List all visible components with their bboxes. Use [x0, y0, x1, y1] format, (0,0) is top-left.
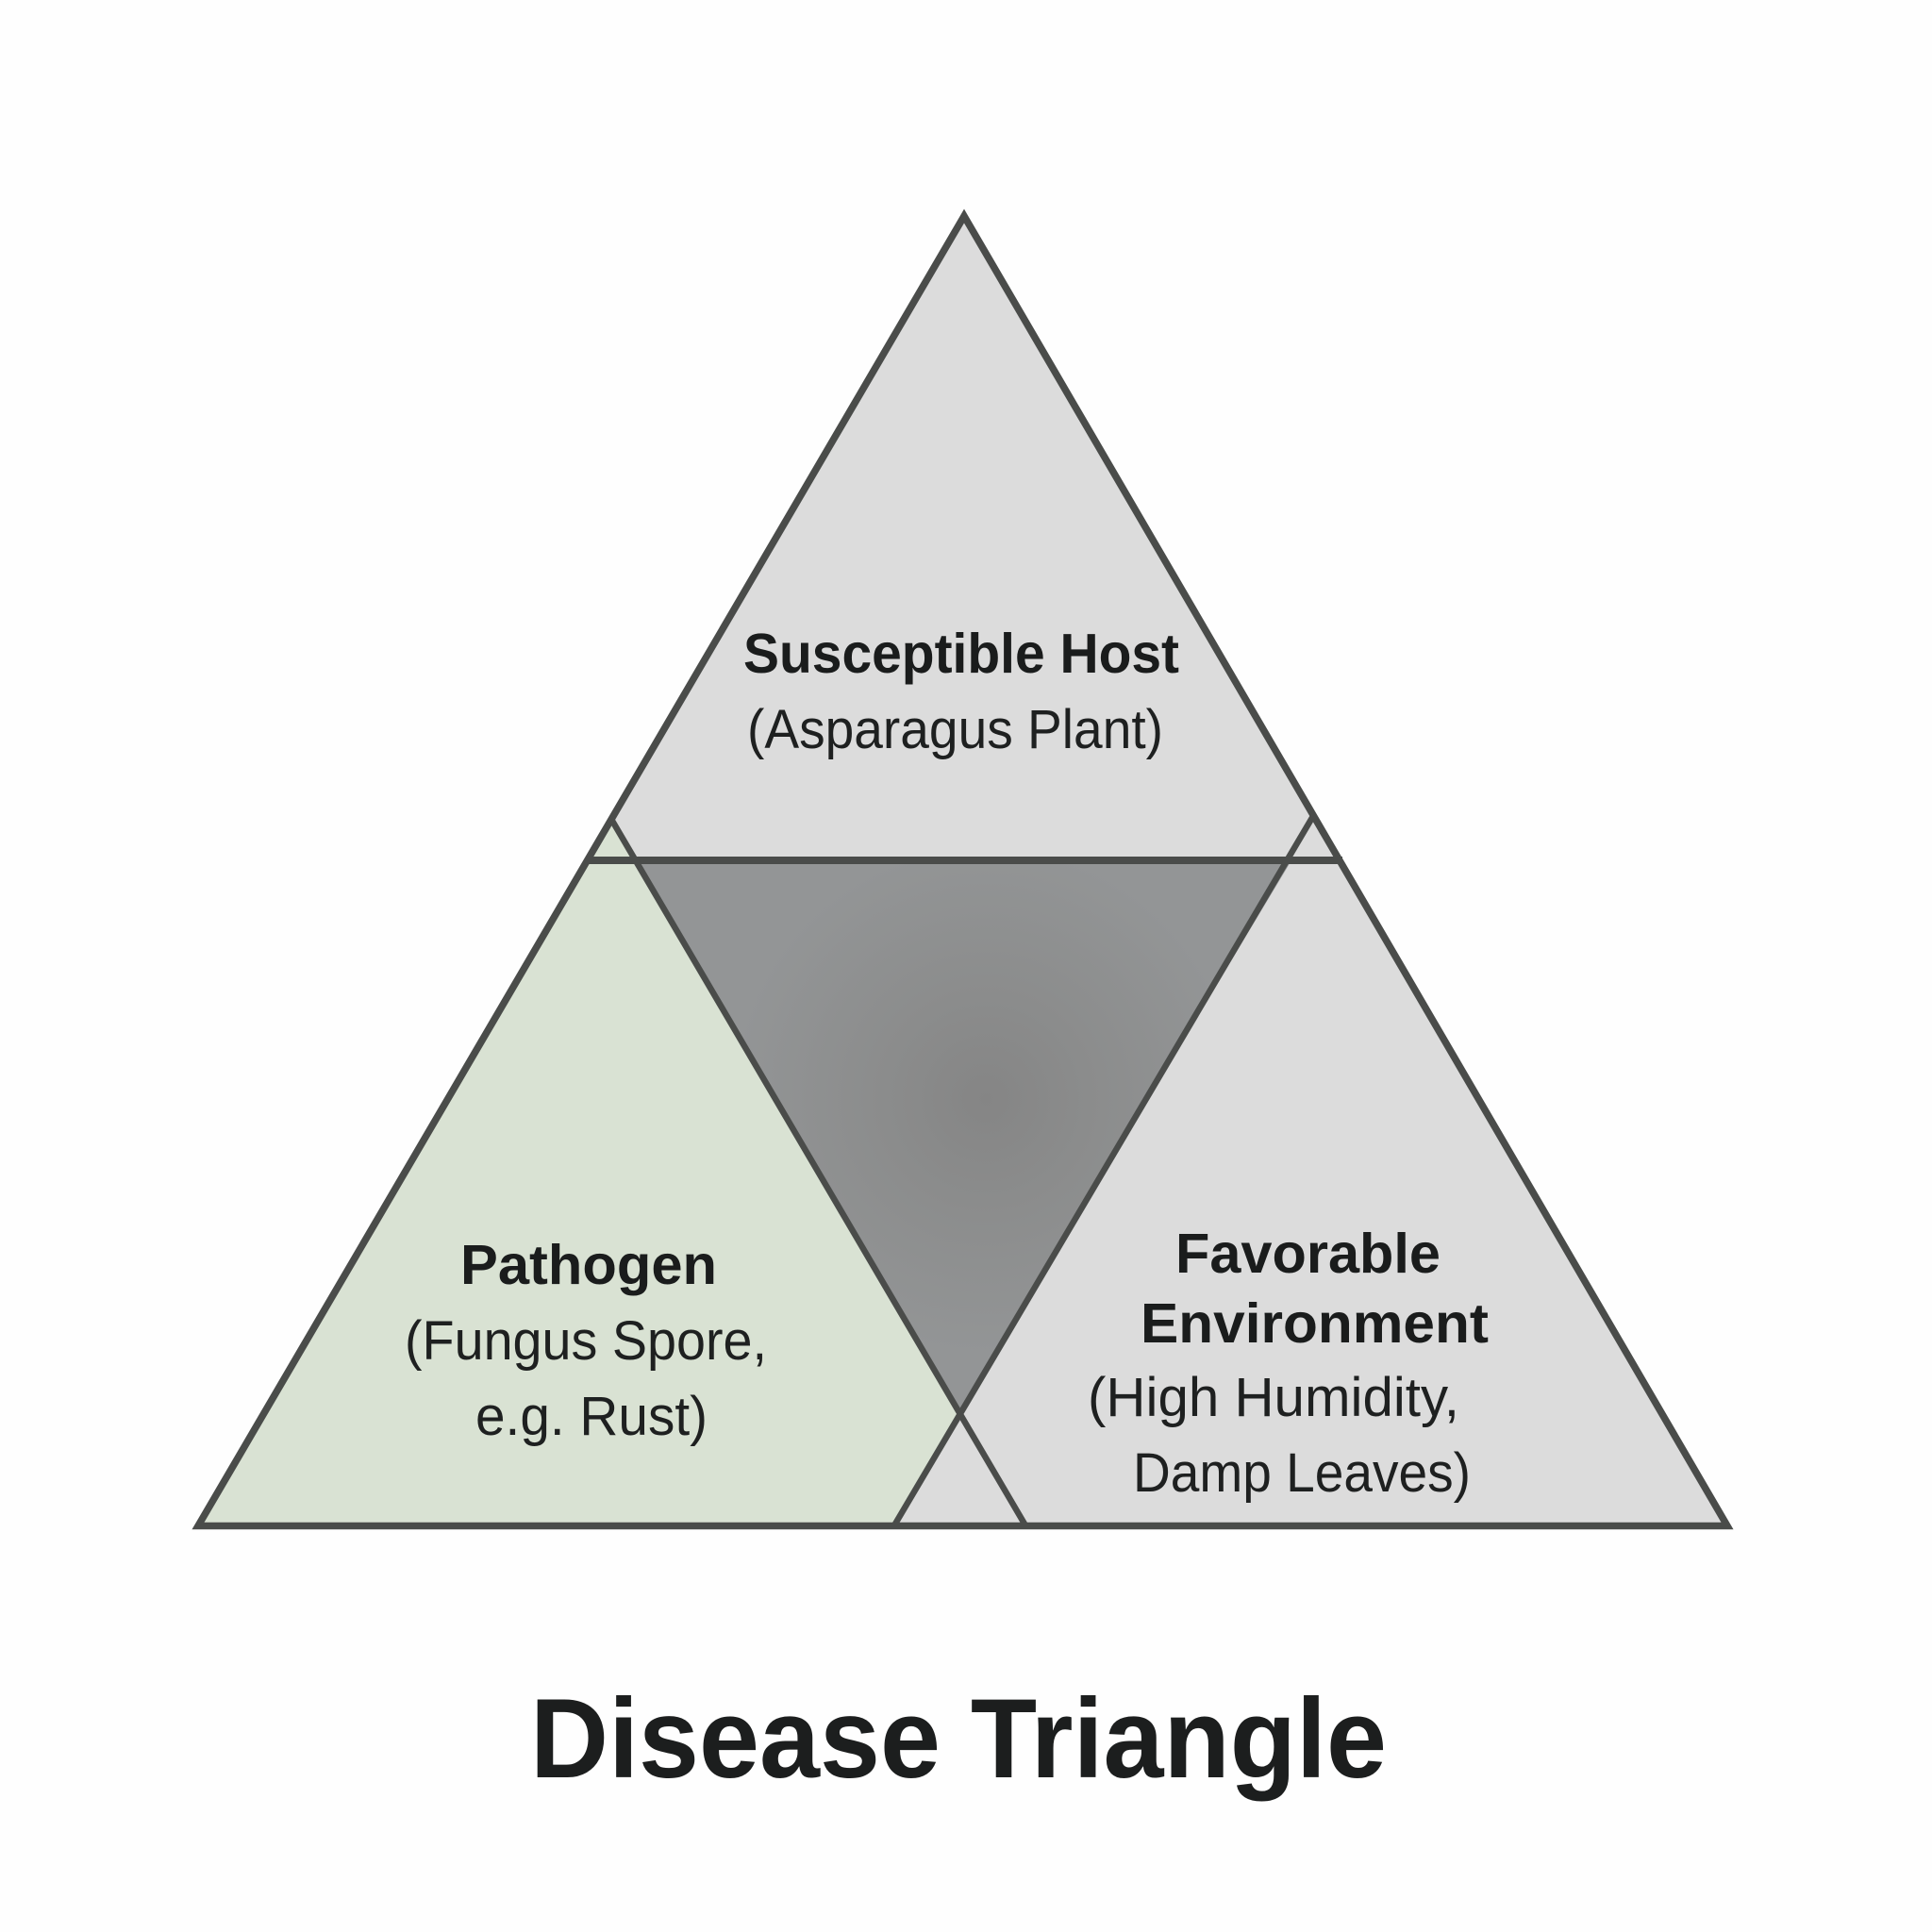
- label: favorable environment: Favorable: [1175, 1223, 1441, 1285]
- title: Disease Triangle: [530, 1675, 1387, 1802]
- diagram: disease triangle: [198, 216, 1727, 1526]
- panel: susceptible host: [198, 216, 1727, 1525]
- label: susceptible host: Susceptible Host: [743, 623, 1179, 685]
- label: favorable environment: (High Humidity,: [1088, 1367, 1459, 1428]
- label: favorable environment: Damp Leaves): [1133, 1442, 1471, 1504]
- label: pathogen: Pathogen: [460, 1234, 717, 1296]
- label: favorable environment: Environment: [1141, 1292, 1489, 1355]
- horizontal divider: [586, 857, 1342, 864]
- outer triangle outline: [198, 216, 1727, 1526]
- label: pathogen: e.g. Rust): [475, 1386, 708, 1447]
- panel: pathogen: [198, 821, 959, 1525]
- label: favorable environment: [1088, 1223, 1489, 1504]
- inner line falling right: [612, 821, 1025, 1525]
- label: pathogen: (Fungus Spore,: [405, 1310, 767, 1372]
- label: susceptible host: [743, 623, 1179, 760]
- label: susceptible host: (Asparagus Plant): [747, 699, 1163, 760]
- panel: disease overlap centre: [634, 860, 1291, 1413]
- label: pathogen: [405, 1234, 767, 1447]
- inner line falling left: [894, 816, 1313, 1525]
